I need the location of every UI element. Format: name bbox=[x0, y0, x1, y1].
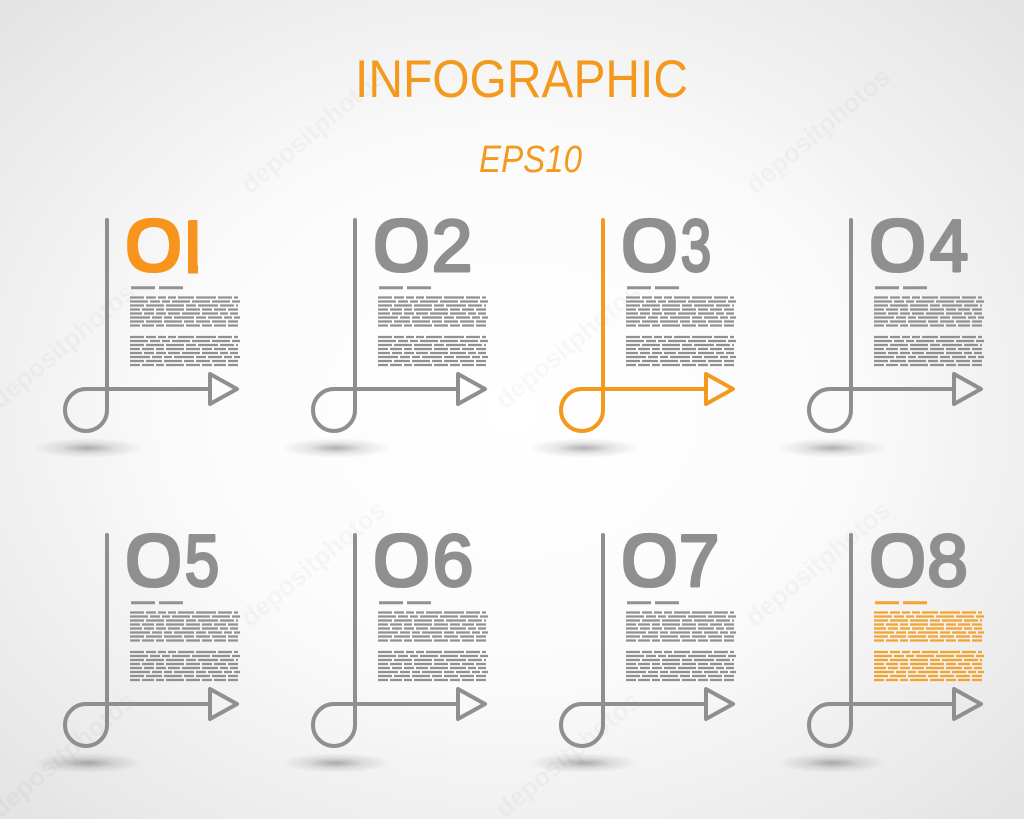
panel: step 06 bbox=[281, 521, 488, 773]
panel: step 06: 6 bbox=[433, 521, 473, 602]
panel: step 02: 0 bbox=[371, 206, 432, 286]
watermark text: depositphotos bbox=[235, 494, 391, 633]
panel: step 07: 0 bbox=[619, 521, 680, 601]
panel: step 05 bbox=[33, 521, 240, 773]
panel: step 03: 0 bbox=[619, 206, 680, 286]
watermark text: depositphotos bbox=[235, 61, 391, 200]
panel: step 04: 4 bbox=[930, 206, 968, 287]
panel: step 03 bbox=[529, 205, 736, 458]
panel: step 02 bbox=[281, 206, 488, 458]
panel: step 06: 0 bbox=[371, 521, 432, 601]
watermark text: depositphotos bbox=[740, 494, 896, 633]
panel: step 03: 3 bbox=[681, 205, 711, 287]
watermark text: depositphotos bbox=[490, 276, 646, 415]
panel: step 07: 7 bbox=[679, 521, 719, 602]
panel: step 05: 5 bbox=[185, 521, 219, 602]
watermark text: depositphotos bbox=[740, 61, 896, 200]
panel: step 01: 0 bbox=[123, 206, 184, 286]
panel: step 08 bbox=[777, 521, 984, 773]
panel: step 08: 8 bbox=[927, 521, 968, 602]
panel: step 04: 0 bbox=[867, 206, 928, 286]
panel: step 05: 0 bbox=[123, 521, 184, 601]
panel: step 02: 2 bbox=[432, 206, 472, 287]
panel: step 08: 0 bbox=[867, 521, 928, 601]
panel: step 04 bbox=[777, 206, 984, 458]
panel: step 01 bbox=[33, 206, 240, 458]
panel: step 07 bbox=[529, 521, 736, 773]
subtitle: EPS10 bbox=[479, 139, 582, 181]
panel: step 01: 1 bbox=[171, 207, 212, 288]
title: INFOGRAPHIC bbox=[355, 50, 688, 109]
